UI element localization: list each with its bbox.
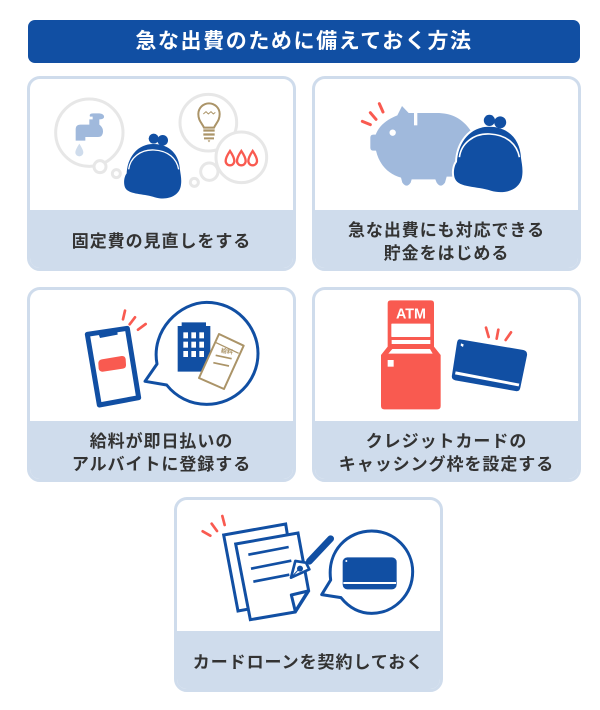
label: 固定費の見直しをする <box>72 232 251 251</box>
label <box>312 421 581 482</box>
label: 給料が即日払いの <box>90 432 233 450</box>
panel: daily pay <box>27 287 296 482</box>
icon: credit card <box>452 339 527 391</box>
icon: pen <box>291 539 331 578</box>
label: 貯金をはじめる <box>384 244 509 262</box>
icon: purse <box>124 134 181 198</box>
illustration: phone and speech bubble: 給料 <box>220 347 233 356</box>
panel: card cashing <box>312 287 581 482</box>
icon: card <box>343 557 397 589</box>
label <box>312 210 581 271</box>
label: 急な出費にも対応できる <box>348 220 545 240</box>
label: アルバイトに登録する <box>72 454 251 474</box>
illustration: purse with thought bubbles <box>54 93 268 198</box>
illustration: piggy bank and purse <box>360 102 522 192</box>
panel: card loan <box>174 497 443 692</box>
illustration: ATM and card <box>381 300 528 410</box>
label: キャッシング枠を設定する <box>339 454 554 474</box>
title <box>28 20 580 63</box>
label: カードローンを契約しておく <box>193 653 424 672</box>
panel: savings <box>312 76 581 271</box>
illustration: contract and speech bubble <box>201 514 414 622</box>
label <box>174 631 443 692</box>
icon: ATM: ATM <box>396 307 426 323</box>
label <box>27 421 296 482</box>
panel: fixed costs <box>27 76 296 271</box>
illustration: phone and speech bubble <box>84 300 260 408</box>
label: クレジットカードの <box>366 432 527 450</box>
title: 急な出費のために備えておく方法 <box>135 30 473 53</box>
label <box>27 210 296 271</box>
icon: ATM <box>381 300 441 409</box>
